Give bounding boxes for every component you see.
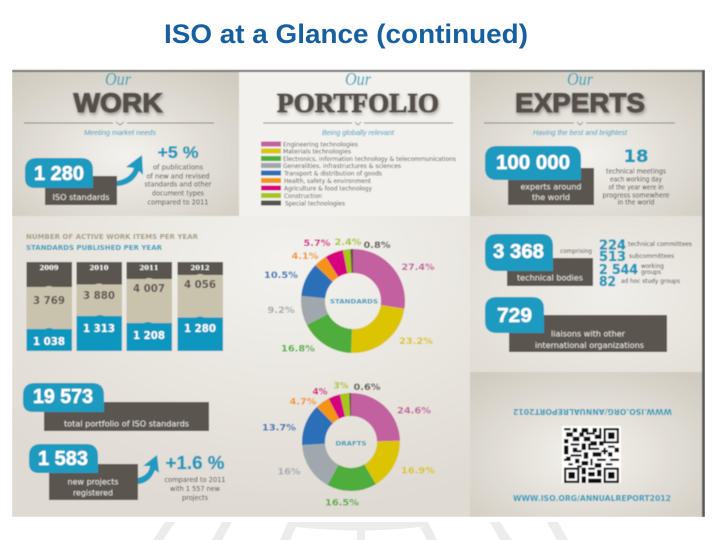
technical bodies breakdown: comprising	[560, 248, 592, 255]
stat: 1 280 ISO standards: ISO standards	[52, 193, 110, 202]
stat: 1 583 new projects	[29, 444, 138, 500]
heading: our work	[74, 69, 163, 118]
stat: 729 liaisons: 729	[497, 305, 532, 327]
stat: 3 368 technical bodies: technical bodies	[517, 274, 583, 282]
donut chart: drafts: 4%	[312, 388, 328, 398]
stat: +1.6 %	[164, 453, 226, 502]
legend: Engineering technologies	[283, 140, 359, 148]
chart headings	[26, 233, 199, 252]
heading: our portfolio	[277, 69, 439, 118]
heading: our experts: EXPERTS	[515, 88, 645, 118]
stat: 18 technical meetings: progress somewhere	[602, 192, 670, 200]
stat: +5 %: document types	[152, 190, 204, 198]
flipped url: WWW.ISO.ORG/ANNUALREPORT2012	[513, 407, 672, 416]
infographic	[12, 69, 705, 517]
legend: Construction	[284, 192, 322, 200]
legend	[261, 140, 457, 208]
donut chart: standards: 10.5%	[264, 271, 298, 281]
stat: 100 000 experts	[485, 146, 594, 205]
technical bodies breakdown	[560, 238, 692, 290]
bar: 2012: 1 280	[184, 323, 216, 335]
stat: 729 liaisons: international organizations	[535, 341, 644, 350]
technical bodies breakdown: 224	[599, 238, 626, 254]
stat: +1.6 %: projects	[182, 494, 208, 502]
technical bodies breakdown: subcommittees	[629, 253, 674, 260]
icon: up arrow	[117, 155, 143, 186]
panel: our portfolio	[261, 69, 457, 208]
panel backgrounds	[12, 70, 705, 517]
technical bodies breakdown: 2 544	[599, 263, 638, 278]
donut chart: drafts: 24.6%	[397, 406, 431, 416]
stat: +1.6 %: with 1 557 new	[170, 485, 220, 493]
donut chart: standards: 27.4%	[402, 263, 434, 273]
bar: 2011: 2011	[140, 264, 158, 272]
bar: 2010	[76, 262, 122, 351]
stat: +5 %: standards and other	[144, 180, 212, 188]
stat: 100 000 experts: 100 000	[496, 152, 570, 174]
technical bodies breakdown: technical committees	[628, 241, 692, 248]
stat: 3 368 technical bodies	[485, 234, 593, 286]
subtitle: Having the best and brightest	[533, 128, 628, 137]
stat: 18 technical meetings: 18	[624, 147, 648, 167]
donut chart: standards	[264, 238, 434, 354]
technical bodies breakdown: groups	[641, 269, 661, 276]
legend: Agriculture & food technology	[284, 184, 372, 192]
donut chart: drafts: 0.6%	[354, 383, 380, 393]
icon: up arrow	[138, 455, 159, 484]
heading: our experts	[515, 69, 645, 118]
stat: +5 %: compared to 2011	[148, 198, 208, 206]
bar: 2011: 1 208	[133, 330, 165, 342]
legend: Materials technologies	[283, 148, 352, 156]
stat: 18 technical meetings: each working day	[610, 176, 662, 184]
bar: 2011	[126, 262, 172, 351]
stat: 19 573 total portfolio	[23, 383, 209, 431]
stat: 18 technical meetings	[602, 147, 670, 206]
bar: 2010: 1 313	[83, 323, 115, 335]
donut chart: drafts: 16.5%	[325, 498, 359, 508]
background watermark	[153, 522, 568, 540]
stat: 18 technical meetings: of the year were in	[608, 184, 664, 192]
donut chart: standards: STANDARDS	[330, 298, 378, 306]
stat: 1 280 ISO standards: 1 280	[34, 163, 84, 185]
stat: +5 %	[144, 143, 212, 206]
subtitle: Being globally relevant	[322, 128, 395, 137]
legend: Electronics, information technology & telecommunications	[283, 155, 457, 163]
title: ISO at a Glance (continued)	[164, 19, 528, 49]
stat: +1.6 %: compared to 2011	[164, 476, 226, 484]
stat: 100 000 experts: experts around	[520, 182, 582, 192]
stat: 729 liaisons: liaisons with other	[551, 330, 626, 338]
stat: +5 %: +5 %	[158, 143, 198, 162]
stat: 3 368 technical bodies: 3 368	[493, 241, 544, 263]
bar: 2009: 2009	[40, 264, 59, 272]
donut chart: drafts: 16%	[278, 468, 300, 478]
bar: 2009: 1 038	[33, 336, 65, 348]
stat: 1 583 new projects: 1 583	[38, 448, 88, 470]
bar: 2010: 3 880	[83, 290, 115, 302]
donut chart: standards: 23.2%	[399, 337, 433, 347]
donut chart: drafts: 4.7%	[290, 398, 316, 408]
stat: +5 %: of publications	[153, 164, 203, 172]
donut chart: standards: 16.8%	[281, 344, 315, 354]
bar: 2012	[178, 262, 223, 351]
url: WWW.ISO.ORG/ANNUALREPORT2012	[513, 494, 671, 503]
donut chart: drafts: 16.9%	[401, 466, 435, 476]
bar: 2010: 2010	[90, 264, 109, 272]
stat: 1 280 ISO standards	[25, 158, 117, 205]
bar: 2012: 2012	[190, 264, 210, 272]
heading: our portfolio: PORTFOLIO	[277, 88, 439, 118]
donut chart: standards: 0.8%	[364, 241, 390, 251]
chart headings: NUMBER OF ACTIVE WORK ITEMS PER YEAR	[26, 233, 199, 241]
technical bodies breakdown: ad hoc study groups	[621, 278, 680, 285]
legend: Health, safety & environment	[284, 177, 371, 185]
stat: 729 liaisons	[485, 297, 667, 352]
donut chart: standards: 5.7%	[304, 239, 330, 249]
stat: 19 573 total portfolio: total portfolio of ISO standards	[64, 420, 189, 428]
bar: 2012: 4 056	[184, 279, 216, 291]
bar: 2009: 3 769	[33, 295, 65, 307]
stat: +1.6 %: +1.6 %	[166, 453, 224, 473]
panel: our experts	[484, 69, 675, 206]
legend: Generalities, infrastructures & sciences	[283, 162, 402, 170]
panel: our work	[24, 69, 214, 206]
stat: +5 %: of new and revised	[146, 172, 210, 180]
bar: 2011: 4 007	[133, 283, 165, 295]
technical bodies breakdown: 513	[599, 250, 626, 265]
technical bodies breakdown: working	[641, 263, 664, 270]
heading: our work: Our	[105, 69, 132, 89]
donut chart: drafts: 3%	[334, 382, 348, 392]
technical bodies breakdown: 82	[599, 275, 616, 290]
stat: 19 573 total portfolio: 19 573	[33, 386, 93, 408]
donut chart: standards: 2.4%	[334, 238, 362, 248]
legend: Special technologies	[285, 200, 346, 208]
subtitle: Meeting market needs	[84, 128, 156, 137]
legend: Transport & distribution of goods	[283, 170, 383, 178]
stat: 18 technical meetings: in the world	[618, 198, 654, 206]
donut chart: drafts: DRAFTS	[336, 440, 367, 448]
donut chart: standards: 9.2%	[268, 306, 294, 316]
heading: our work: WORK	[74, 88, 163, 118]
heading: our experts: Our	[567, 69, 594, 89]
qr code	[562, 426, 621, 483]
stat: 18 technical meetings: technical meetings	[606, 168, 666, 176]
stat: 1 583 new projects: registered	[73, 488, 113, 498]
donut chart: drafts	[262, 382, 435, 508]
panel: annual report link	[513, 407, 672, 503]
donut chart: drafts: 13.7%	[262, 424, 296, 434]
stat: 100 000 experts: the world	[532, 193, 570, 202]
heading: our portfolio: Our	[345, 69, 372, 89]
stat: 1 583 new projects: new projects	[68, 478, 119, 486]
bar chart: work items per year	[26, 262, 223, 351]
donut chart: standards: 4.1%	[292, 252, 318, 262]
bar: 2009	[26, 262, 72, 351]
chart headings: STANDARDS PUBLISHED PER YEAR	[26, 244, 163, 252]
